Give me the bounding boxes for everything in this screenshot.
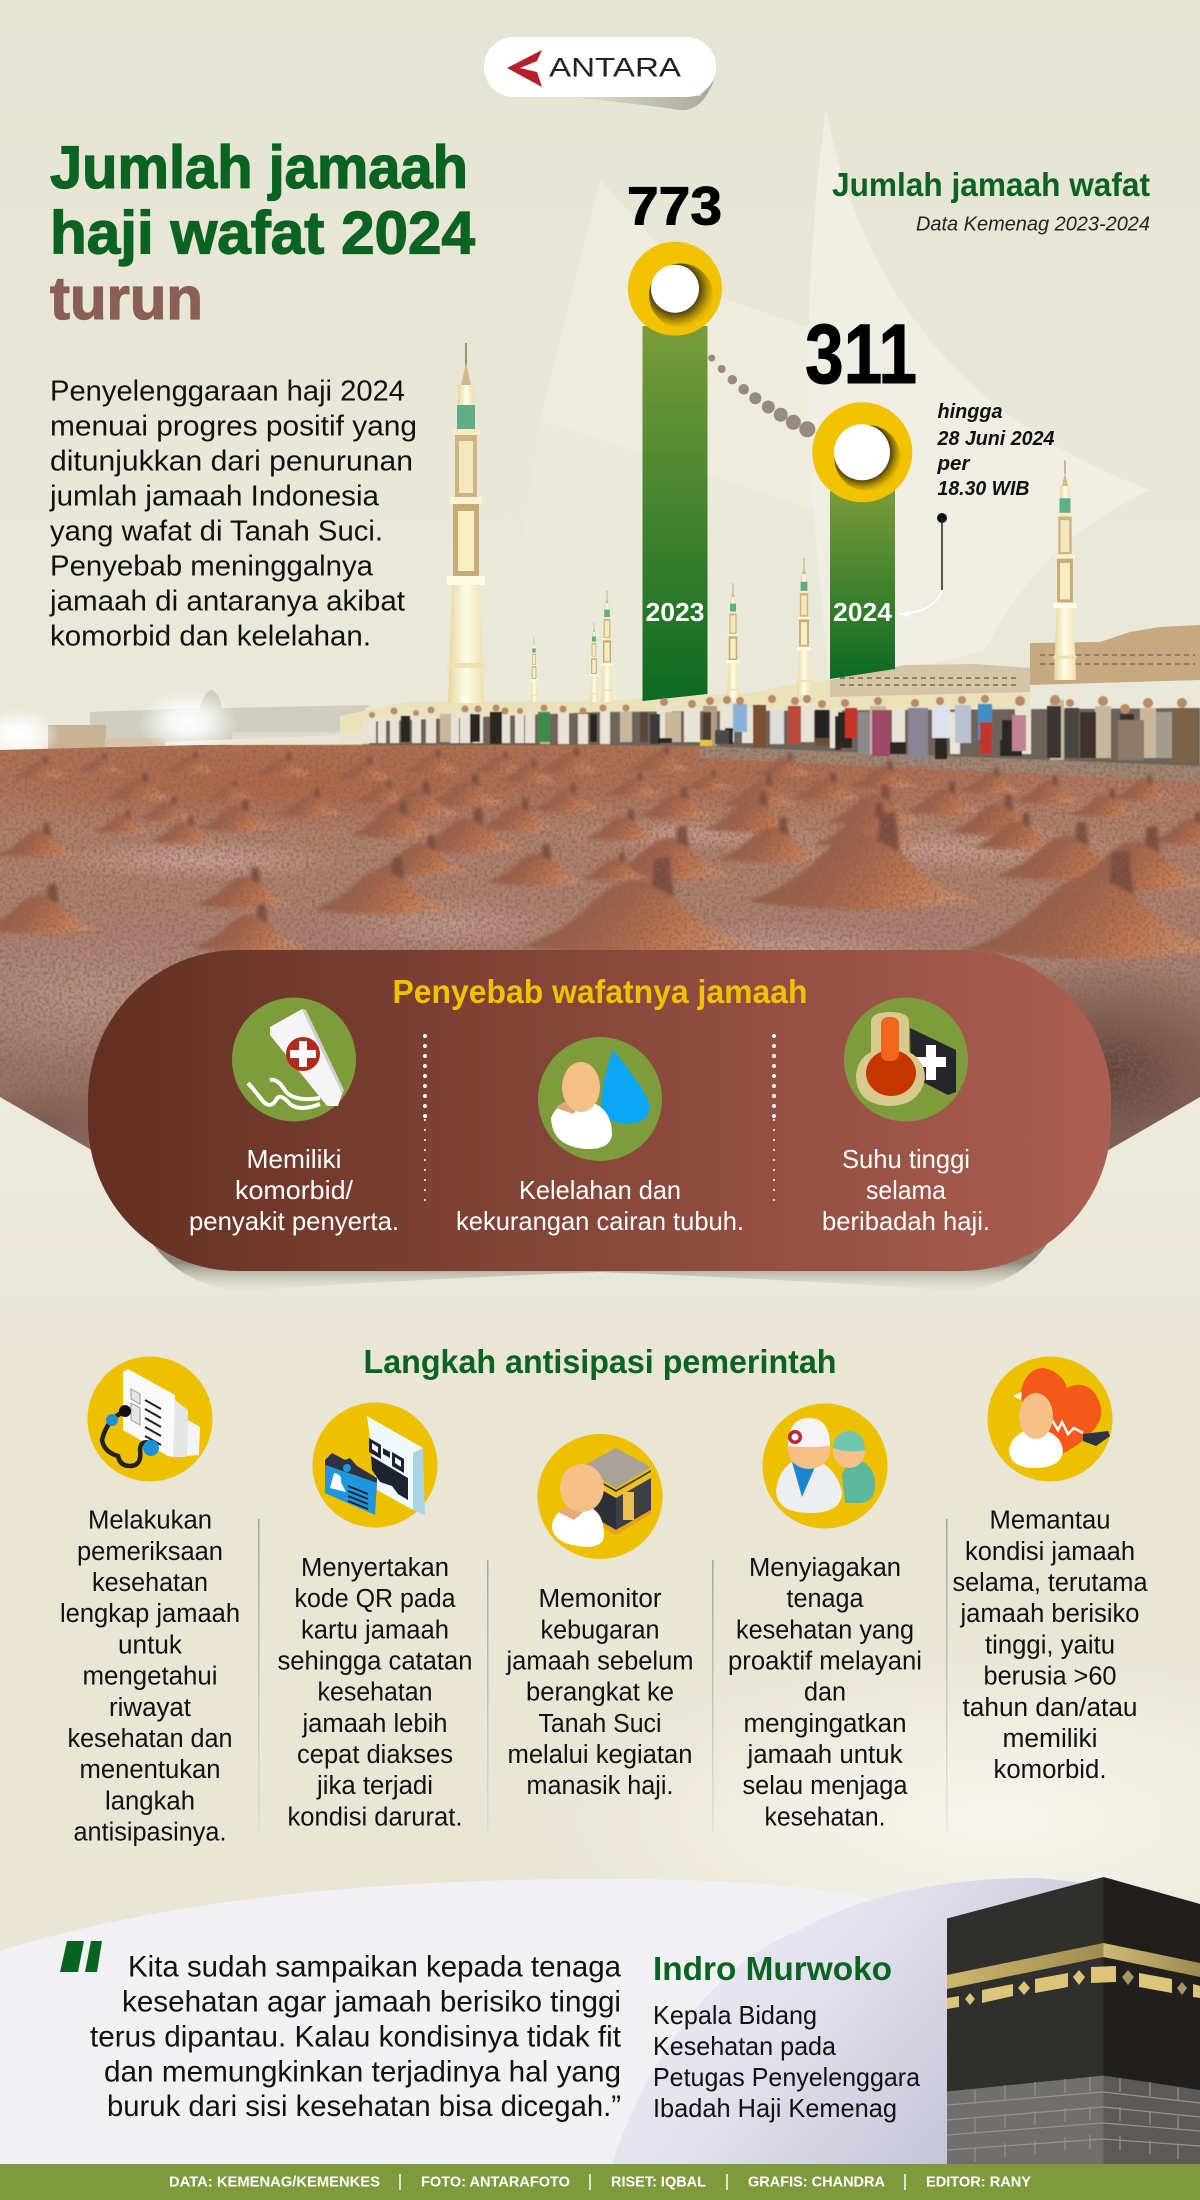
text: langkah 2 <box>278 1554 472 1832</box>
text: langkah 5: jamaah berisiko <box>959 1600 1140 1628</box>
cause label 1: penyakit penyerta. <box>189 1206 399 1236</box>
title <box>50 134 476 332</box>
logo: ANTARA <box>484 37 716 110</box>
text: langkah 3: berangkat ke <box>526 1678 674 1706</box>
footer: credits: RISET: IQBAL <box>611 2174 706 2190</box>
footer: credits: GRAFIS: CHANDRA <box>748 2174 885 2190</box>
title: haji wafat 2024 <box>50 200 476 266</box>
speaker role: Petugas Penyelenggara <box>653 2062 921 2092</box>
logo: ANTARA: ANTARA <box>549 52 681 82</box>
text: langkah 2: kode QR pada <box>294 1585 456 1613</box>
crowd of pilgrims <box>232 695 1200 766</box>
icon: health documents and stethoscope <box>88 1356 212 1482</box>
intro text block: yang wafat di Tanah Suci. <box>50 516 383 548</box>
text: langkah 5: memiliki <box>1002 1725 1098 1753</box>
text: langkah 5: tahun dan/atau <box>962 1694 1138 1722</box>
text: langkah 2: jamaah lebih <box>301 1710 448 1738</box>
speaker role <box>653 2000 921 2123</box>
icon: medical tag <box>232 998 356 1122</box>
text: langkah 2: Menyertakan <box>301 1554 449 1582</box>
intro text block: Penyelenggaraan haji 2024 <box>50 376 405 408</box>
text: langkah 2: kartu jamaah <box>301 1616 449 1644</box>
chart heading: Jumlah jamaah wafat <box>832 166 1150 203</box>
quote text <box>90 1950 622 2123</box>
text: langkah 4: jamaah untuk <box>746 1741 903 1769</box>
text: langkah 5: Memantau <box>990 1507 1110 1535</box>
bar 2024 <box>830 490 895 679</box>
cause label 3: selama <box>866 1175 947 1205</box>
text: langkah 4: selau menjaga <box>742 1772 908 1800</box>
text: langkah 4: mengingatkan <box>744 1710 906 1738</box>
date note: hingga <box>938 401 1002 423</box>
cause label 3: beribadah haji. <box>822 1206 990 1236</box>
icon: person and Kaaba <box>538 1434 662 1559</box>
text: langkah 5 <box>952 1507 1148 1784</box>
text: langkah 5: komorbid. <box>994 1756 1106 1784</box>
cause label 1: Memiliki <box>246 1144 342 1174</box>
text: langkah 1: lengkap jamaah <box>60 1600 240 1628</box>
date note: 28 Juni 2024 <box>937 428 1054 450</box>
text: langkah 4: dan <box>804 1678 846 1706</box>
intro text block: menuai progres positif yang <box>50 410 417 442</box>
cause label 1 <box>189 1144 399 1236</box>
icon: thermometer <box>844 998 968 1122</box>
cause label 2: Kelelahan dan <box>519 1175 681 1205</box>
cause label 1: komorbid/ <box>235 1175 354 1205</box>
cause label 2 <box>456 1175 744 1236</box>
speaker role: Ibadah Haji Kemenag <box>653 2093 897 2123</box>
intro text block: jamaah di antaranya akibat <box>49 586 405 618</box>
text: langkah 2: cepat diakses <box>297 1741 453 1769</box>
icon: medical staff <box>762 1404 888 1528</box>
dotted connector <box>708 354 815 437</box>
panel heading: Penyebab wafatnya jamaah <box>392 973 808 1010</box>
mound field <box>0 745 1200 959</box>
panel shadow <box>150 1240 1050 1291</box>
panel: penyebab wafatnya jamaah <box>88 950 1111 1271</box>
title: turun <box>50 265 203 332</box>
text: langkah 1: riwayat <box>109 1694 191 1722</box>
minaret: pair <box>601 590 613 702</box>
text: langkah 1: mengetahui <box>82 1662 218 1690</box>
text: langkah 3: manasik haji. <box>526 1772 674 1800</box>
cause label 2: kekurangan cairan tubuh. <box>456 1206 744 1236</box>
icon: person and water drop <box>538 1037 662 1161</box>
text: langkah 5: tinggi, yaitu <box>985 1632 1115 1660</box>
footer: credits: DATA: KEMENAG/KEMENKES <box>169 2174 380 2190</box>
text: langkah 5: kondisi jamaah <box>965 1538 1135 1566</box>
quote background <box>0 1878 1104 2164</box>
quote text: Kita sudah sampaikan kepada tenaga <box>128 1950 621 1984</box>
date note: per <box>936 453 971 475</box>
text: langkah 1 <box>60 1507 240 1846</box>
text: langkah 4: Menyiagakan <box>749 1554 901 1582</box>
leader line to 2024 <box>898 513 947 617</box>
background sail shapes <box>500 110 1200 1990</box>
minaret: small left <box>531 637 537 702</box>
text: langkah 3 <box>506 1585 694 1800</box>
text: langkah 1: antisipasinya. <box>74 1818 226 1846</box>
date note: 18.30 WIB <box>938 478 1030 500</box>
footer: credits: FOTO: ANTARAFOTO <box>421 2174 570 2190</box>
speaker role: Kesehatan pada <box>653 2031 837 2061</box>
text: langkah 3: kebugaran <box>540 1616 660 1644</box>
quote text: terus dipantau. Kalau kondisinya tidak fit <box>90 2020 622 2054</box>
text: langkah 4 <box>728 1554 922 1832</box>
quote text: kesehatan agar jamaah berisiko tinggi <box>122 1986 621 2018</box>
bar 2023 <box>642 326 708 701</box>
intro text block: komorbid dan kelelahan. <box>50 620 371 652</box>
text: langkah 5: berusia >60 <box>984 1662 1116 1690</box>
intro text block <box>49 376 417 652</box>
minaret: centre <box>727 583 739 702</box>
intro text block: ditunjukkan dari penurunan <box>50 446 413 478</box>
heading: langkah antisipasi: Langkah antisipasi pemerintah <box>364 1343 836 1380</box>
text: langkah 1: pemeriksaan <box>77 1538 223 1566</box>
quote text: dan memungkinkan terjadinya hal yang <box>104 2056 621 2088</box>
text: langkah 5: selama, terutama <box>952 1569 1148 1597</box>
text: langkah 1: langkah <box>105 1788 195 1816</box>
date note <box>936 401 1054 500</box>
speaker role: Kepala Bidang <box>653 2000 817 2030</box>
intro text block: Penyebab meninggalnya <box>50 550 374 582</box>
minaret: main <box>447 343 485 703</box>
text: langkah 3: melalui kegiatan <box>508 1741 692 1769</box>
text: langkah 4: proaktif melayani <box>728 1648 922 1676</box>
text: langkah 2: kesehatan <box>318 1678 432 1706</box>
icon: QR code and ID card <box>312 1402 438 1528</box>
bar chart: jumlah jamaah wafat <box>627 176 917 701</box>
text: langkah 4: tenaga <box>786 1585 864 1613</box>
minaret: mid right <box>797 558 811 695</box>
illustration: Kaaba <box>947 1877 1200 2164</box>
intro text block: jumlah jamaah Indonesia <box>49 480 380 512</box>
text: langkah 3: Memonitor <box>538 1585 662 1613</box>
text: langkah 4: kesehatan yang <box>736 1616 914 1644</box>
quote text: buruk dari sisi kesehatan bisa dicegah.” <box>107 2090 621 2123</box>
ring marker 2024 <box>812 402 912 502</box>
text: langkah 2: jika terjadi <box>316 1772 433 1800</box>
text: langkah 2: kondisi darurat. <box>288 1804 462 1832</box>
value 311: 311 <box>805 307 917 401</box>
cause label 3: Suhu tinggi <box>842 1144 970 1174</box>
cause label 3 <box>822 1144 990 1236</box>
text: langkah 4: kesehatan. <box>764 1804 886 1832</box>
text: langkah 1: menentukan <box>80 1756 220 1784</box>
minaret: behind pair <box>590 623 598 702</box>
icon: quotation mark <box>60 1941 102 1972</box>
value 773: 773 <box>627 176 722 236</box>
mosque skyline: minarets, buildings <box>0 343 1200 761</box>
column dividers <box>258 1519 948 1832</box>
bar 2023: 2023 <box>646 597 704 627</box>
minaret: far right <box>1053 460 1077 680</box>
title: Jumlah jamaah <box>50 134 468 201</box>
chart source: Data Kemenag 2023-2024 <box>916 214 1150 236</box>
speaker name: Indro Murwoko <box>653 1950 892 1987</box>
photo: cemetery ground <box>0 735 1200 1180</box>
text: langkah 1: kesehatan <box>92 1569 208 1597</box>
icon: heart monitor <box>988 1356 1112 1482</box>
footer: credits <box>0 2164 1200 2200</box>
text: langkah 1: kesehatan dan <box>68 1725 232 1753</box>
text: langkah 2: sehingga catatan <box>278 1648 472 1676</box>
text: langkah 3: Tanah Suci <box>538 1710 662 1738</box>
text: langkah 1: Melakukan <box>88 1507 212 1535</box>
text: langkah 1: untuk <box>118 1632 182 1660</box>
footer: credits: EDITOR: RANY <box>926 2174 1031 2190</box>
ring marker 2023 <box>628 242 722 336</box>
bar 2024: 2024 <box>833 597 893 627</box>
text: langkah 3: jamaah sebelum <box>506 1648 694 1676</box>
dotted dividers <box>425 1036 774 1210</box>
